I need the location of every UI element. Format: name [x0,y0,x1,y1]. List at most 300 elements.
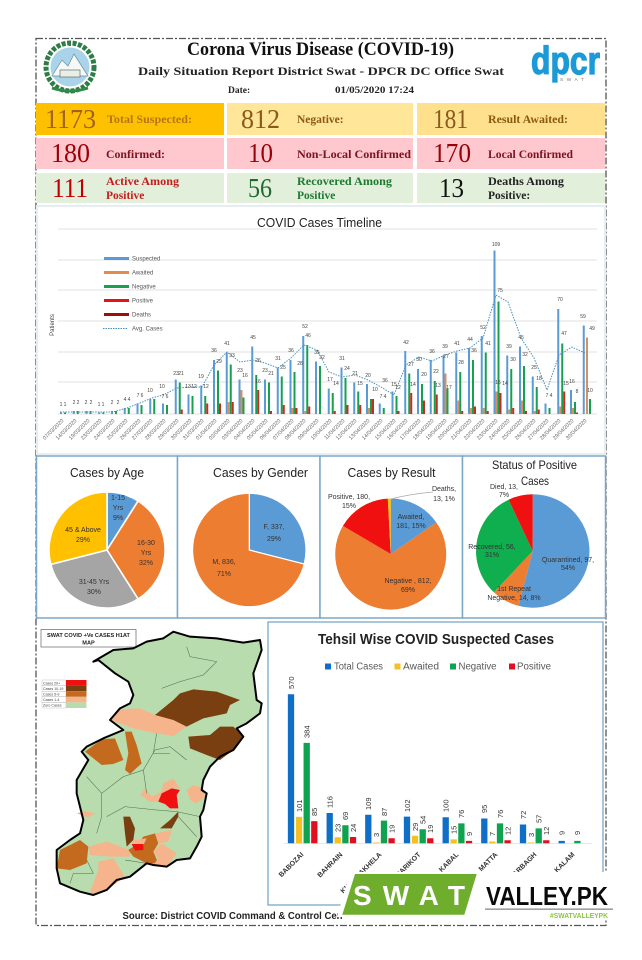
data labels: 2 [117,400,120,406]
data labels: 12 [191,384,197,390]
map legend: Cases 5-9 [43,692,59,696]
data labels: 46 [305,333,311,339]
card: result awaited: Result Awaited: [488,114,568,126]
chart legend: Awaited [132,270,153,276]
panel: status of positive cases [462,456,606,618]
date axis labels: 15/04/2020 [374,418,397,441]
value labels: 54 [418,816,428,824]
pie labels: status: Quarantined, 97, [542,557,594,564]
pie labels: gender: 29% [267,536,281,543]
data labels: 4 [550,393,553,399]
pie labels: result [328,486,456,594]
data labels: 24 [344,366,350,372]
pie labels: status: 1st Repeat [497,586,531,593]
data labels: 12 [203,384,209,390]
bars: awaited [299,817,531,843]
pie labels: age: 16-30 [137,540,155,547]
data labels: 17 [327,377,333,383]
data labels: 39 [442,344,448,350]
icon: DPCR logo: dpcr [531,40,600,83]
map of Swat district [57,632,262,895]
card: non-local confirmed: 10 [248,138,273,168]
card: confirmed: Confirmed: [106,149,165,161]
data labels: 10 [587,388,593,394]
card: negative [227,103,413,135]
date axis labels: 30/03/2020 [170,418,193,441]
card: deaths among positive: 13 [439,173,464,203]
value labels: 29 [411,823,420,831]
chart legend: Positive [132,298,154,304]
value labels: 101 [295,799,304,812]
date axis labels: 19/03/2020 [68,418,91,441]
panel: tehsil wise chart [268,622,603,905]
value labels: 3 [527,833,536,837]
chart legend [103,256,163,332]
card: total suspected: 1173 [45,104,96,134]
date value: 01/05/2020 17:24 [335,86,414,96]
value labels: 19 [426,825,435,833]
value labels: 102 [403,799,412,812]
chart title: Tehsil Wise COVID Suspected Cases [318,631,554,648]
data labels: 26 [255,358,261,364]
pie labels: result: Negative , 812, [384,578,432,585]
pie labels: gender: F, 337, [263,524,285,531]
data labels: 45 [250,335,256,341]
data labels: 20 [421,372,427,378]
heading second line: Cases [521,474,549,488]
card: recovered among positive: Recovered Among [297,176,392,188]
date axis labels: 26/03/2020 [119,418,142,441]
bars: total cases [291,694,562,843]
data labels: 10 [147,388,153,394]
date axis labels: 14/03/2020 [55,418,78,441]
logo: hashtag: #SWATVALLEYPK [550,913,608,920]
card: recovered among positive: Positive [297,190,335,202]
card: deaths among positive: Positive: [488,190,530,202]
data labels: 1 [102,402,105,408]
title: Corona Virus Disease (COVID-19) [187,39,454,60]
tehsil labels: KHWAZAKHELA [340,851,383,895]
logo: VALLEY.PK wordmark: VALLEY.PK [486,881,608,911]
heading: Status of Positive [492,458,577,472]
data labels: 39 [506,344,512,350]
source note: Source: District COVID Command & Control Cen [122,911,343,922]
pie labels: age: 31-45 Yrs [79,579,110,586]
chart legend: Negative [458,662,497,672]
data labels: 15 [563,381,569,387]
date axis labels: 08/04/2020 [284,418,307,441]
heading: Cases by Gender [213,465,309,480]
data labels: 109 [492,242,500,248]
date axis labels: 27/04/2020 [527,418,550,441]
data labels: 16 [242,373,248,379]
map legend: Cases 10-19 [43,687,63,691]
panel: COVID cases timeline [37,206,605,454]
tehsil labels: CHARBAGH [505,851,538,885]
card: recovered among positive: 56 [248,173,272,203]
data labels: 2 [73,400,76,406]
date axis labels: 18/04/2020 [412,418,435,441]
data labels: 8 [576,389,579,395]
tehsil labels: KABAL [438,851,461,874]
date axis labels: 22/04/2020 [463,418,486,441]
card: active among positive: 111 [52,173,88,203]
date axis labels: 02/04/2020 [208,418,231,441]
date axis labels: 13/04/2020 [348,418,371,441]
tehsil labels: MATTA [478,851,499,873]
value labels: 3 [372,833,381,837]
data labels: 28 [297,361,303,367]
subtitle: Daily Situation Report District Swat - DPCR DC Office Swat [138,64,504,78]
date axis labels: 14/04/2020 [361,418,384,441]
data labels: 35 [314,350,320,356]
data labels: 15 [495,380,501,386]
date axis labels [42,418,588,441]
map title box: MAP [82,640,95,646]
date axis labels: 01/04/2020 [195,418,218,441]
card: non-local confirmed: Non-Local Confirmed [297,149,412,161]
value labels: 85 [310,808,319,816]
pie chart: age [49,492,165,608]
heading: Cases by Age [70,465,144,480]
data labels: 36 [471,348,477,354]
icon: DPCR logo: SWAT [560,77,587,83]
data labels: 41 [224,341,230,347]
data labels: 27 [408,362,414,368]
card: confirmed: 180 [51,138,90,168]
date axis labels: 28/03/2020 [144,418,167,441]
pie labels: gender: 71% [217,571,231,578]
map legend: Zero Cases [43,704,62,708]
data labels: 10 [372,387,378,393]
value labels: 76 [457,810,466,818]
date axis labels: 17/04/2020 [399,418,422,441]
data labels: 75 [497,288,503,294]
date axis labels: 04/04/2020 [233,418,256,441]
chart legend: Avg. Cases [132,326,163,332]
pie labels: result: Positive, 180, [328,494,370,501]
card: active among positive: Positive [106,190,144,202]
icon: provincial emblem [46,41,94,91]
date axis labels: 24/03/2020 [93,418,116,441]
card: total suspected: Total Suspected: [107,114,192,126]
data labels: 22 [433,369,439,375]
value labels: 57 [534,815,544,823]
stat cards [36,103,605,203]
value labels: 24 [349,824,358,832]
date axis labels: 06/04/2020 [259,418,282,441]
map legend: Cases 20+ [43,681,60,685]
pie labels: status: 31% [485,552,499,559]
date axis labels: 28/04/2020 [539,418,562,441]
date axis labels: 09/04/2020 [297,418,320,441]
value labels: 9 [558,831,566,835]
data labels: 13 [435,383,441,389]
card: non-local confirmed [227,138,413,169]
bars: negative [65,302,590,414]
data labels: 25 [280,365,286,371]
pie labels: result: Deaths, [432,486,456,493]
data labels: 7 [162,394,165,400]
value labels: 72 [519,811,528,819]
panel: cases by age [36,456,178,618]
data labels: 36 [429,349,435,355]
data labels: 41 [454,341,460,347]
date axis labels: 30/04/2020 [565,418,588,441]
date axis labels: 29/03/2020 [157,418,180,441]
value labels: 12 [504,827,512,835]
data labels: 7 [380,394,383,400]
pie labels: result: 13, 1% [433,496,455,503]
pie chart: gender [193,493,306,607]
data labels: 13 [185,384,191,390]
date axis labels: 11/04/2020 [323,418,346,441]
map title box [41,630,136,647]
date axis labels: 03/04/2020 [221,418,244,441]
pie labels: age: 9% [113,515,123,522]
chart legend: Positive [517,662,551,672]
data labels: 1 [60,402,63,408]
value labels: 109 [364,797,373,810]
pie labels: status: Recovered, 56, [468,544,516,551]
date axis labels: 23/03/2020 [80,418,103,441]
pie labels: status: 7% [499,492,509,499]
header [46,39,600,96]
chart legend: Suspected [132,256,160,262]
data labels: 52 [480,325,486,331]
value labels: 69 [341,812,350,820]
card: deaths among positive: Deaths Among [488,176,564,188]
data labels: 2 [90,400,93,406]
bars: suspected [61,250,584,414]
data labels: 36 [382,378,388,384]
data labels: 21 [268,371,274,377]
data labels: 15 [357,381,363,387]
data labels: 1 [64,402,67,408]
date axis labels: 27/03/2020 [131,418,154,441]
heading: Cases by Result [348,465,436,480]
data labels: 32 [522,352,528,358]
pie labels: age [65,495,155,596]
data labels: 18 [536,376,542,382]
data labels: 20 [365,373,371,379]
bars: positive [182,390,577,414]
logo: underline [485,908,613,910]
tehsil labels: BAHRAIN [317,851,344,879]
card: negative: Negative: [297,114,344,126]
chart legend: Deaths [132,312,151,318]
card: active among positive: Active Among [106,176,179,188]
data labels: 42 [403,340,409,346]
logo: green SWAT block [342,874,477,915]
data labels: 30 [510,357,516,363]
data labels: 23 [173,371,179,377]
leader line: deaths [391,492,433,499]
chart legend: Negative [132,284,156,290]
value labels: 100 [442,799,450,812]
value labels: 87 [380,808,389,816]
data labels: 45 [518,335,524,341]
map legend [42,680,86,708]
value labels: 570 [287,676,296,689]
pie labels: result: 181, 15% [396,523,426,530]
value labels: 7 [488,832,497,836]
pie labels: gender [212,524,285,578]
pie labels: age: 1-15 [111,495,125,502]
tehsil labels: KALAM [554,851,577,874]
chart legend: Awaited [403,662,439,672]
data labels: 31 [275,356,281,362]
date axis labels: 25/03/2020 [106,418,129,441]
data labels: 44 [467,337,473,343]
data labels: 47 [561,331,567,337]
date label: Date: [228,86,250,96]
data labels: 14 [502,381,508,387]
data labels: 6 [166,394,169,400]
card: local confirmed [417,138,605,169]
panel: cases by gender [178,456,320,618]
card: result awaited [417,103,605,135]
average cases line [60,295,585,412]
date axis labels: 21/04/2020 [450,418,473,441]
panel: cases by result [320,456,462,618]
map legend: Cases 1-4 [43,698,59,702]
tehsil labels: BABOZAI [278,851,305,879]
pie chart: status [476,494,589,608]
data labels: 23 [237,368,243,374]
data labels: 7 [137,393,140,399]
value labels: 76 [496,810,505,818]
chart legend: Total Cases [334,662,383,672]
date axis labels: 24/04/2020 [488,418,511,441]
date axis labels: 31/03/2020 [182,418,205,441]
value labels: 384 [302,725,312,738]
data labels: 1 [98,402,101,408]
value labels [287,676,582,837]
pie labels: result: 69% [401,587,415,594]
card: result awaited: 181 [433,104,468,134]
pie labels: status [468,484,594,602]
watermark: Swat Valley logo [337,872,642,920]
card: total suspected [36,103,224,135]
data labels: 21 [352,371,358,377]
card: confirmed [36,138,224,169]
data labels: 27 [443,354,449,360]
card: active among positive [36,173,224,203]
date axis labels: 19/04/2020 [425,418,448,441]
card: local confirmed: Local Confirmed [488,149,574,161]
data labels: 70 [557,297,563,303]
value labels: 95 [480,805,489,813]
chart title: COVID Cases Timeline [257,216,382,230]
data labels: 29 [216,359,222,365]
y axis label: Patients [50,314,56,336]
data labels: 14 [333,381,339,387]
data labels: 12 [395,385,401,391]
data labels: 31 [339,356,345,362]
panel: heat map [41,630,262,895]
data labels: 30 [416,357,422,363]
date axis labels: 25/04/2020 [501,418,524,441]
pie labels: gender: M, 836, [212,559,236,566]
data labels: 21 [178,371,184,377]
bars: positive [314,821,546,843]
date axis labels: 10/04/2020 [310,418,333,441]
data labels: 7 [546,393,549,399]
pie labels: age: 45 & Above [65,527,101,534]
data labels: 52 [302,324,308,330]
data labels: 6 [141,393,144,399]
data labels: 2 [85,400,88,406]
date axis labels: 23/04/2020 [476,418,499,441]
value labels: 116 [326,796,334,808]
card: negative: 812 [241,104,280,134]
chart legend [325,662,551,672]
baseline [284,842,592,844]
data labels [60,242,595,408]
pie labels: result: Awaited, [398,514,424,521]
bars: awaited [229,338,587,414]
data labels: 19 [198,374,204,380]
data labels: 16 [255,379,261,385]
data labels: 32 [319,355,325,361]
value labels: 15 [450,826,458,834]
bars: negative [307,743,577,843]
data labels: 59 [580,314,586,320]
data labels: 49 [589,326,595,332]
data labels: 4 [128,397,131,403]
tehsil labels: BARIKOT [395,851,423,879]
date axis labels: 29/04/2020 [552,418,575,441]
data labels: 14 [410,382,416,388]
date axis labels: 26/04/2020 [514,418,537,441]
value labels: 23 [334,824,342,832]
date axis labels: 16/04/2020 [386,418,409,441]
pie labels: status: Died, 13, [490,484,518,491]
date axis labels: 12/04/2020 [335,418,358,441]
date axis labels: 07/03/2020 [42,418,65,441]
data labels: 2 [111,400,114,406]
date axis labels: 05/04/2020 [246,418,269,441]
data labels: 17 [446,385,452,391]
card: deaths among positive [417,173,605,203]
pie labels: age: Yrs [141,550,152,557]
pie labels: age: 32% [139,560,153,567]
date axis labels: 20/04/2020 [437,418,460,441]
value labels: 19 [388,825,396,833]
card: recovered among positive [227,173,413,203]
data labels: 28 [458,360,464,366]
card: local confirmed: 170 [433,138,471,168]
pie labels: status: Negative, 14, 8% [487,595,541,602]
pie labels: status: 54% [561,565,575,572]
logo: green SWAT block: SWAT [353,880,465,911]
pie labels: age: 30% [87,589,101,596]
data labels: 33 [229,353,235,359]
pie labels: result: 15% [342,503,356,510]
data labels: 16 [569,379,575,385]
data labels: 23 [262,368,268,374]
data labels: 25 [531,365,537,371]
date axis labels: 07/04/2020 [272,418,295,441]
pie labels: age: Yrs [113,505,124,512]
data labels: 15 [391,382,397,388]
pie chart: result [335,498,446,610]
data labels: 36 [288,348,294,354]
value labels: 12 [542,827,551,835]
data labels: 2 [77,400,80,406]
data labels: 4 [384,394,387,400]
